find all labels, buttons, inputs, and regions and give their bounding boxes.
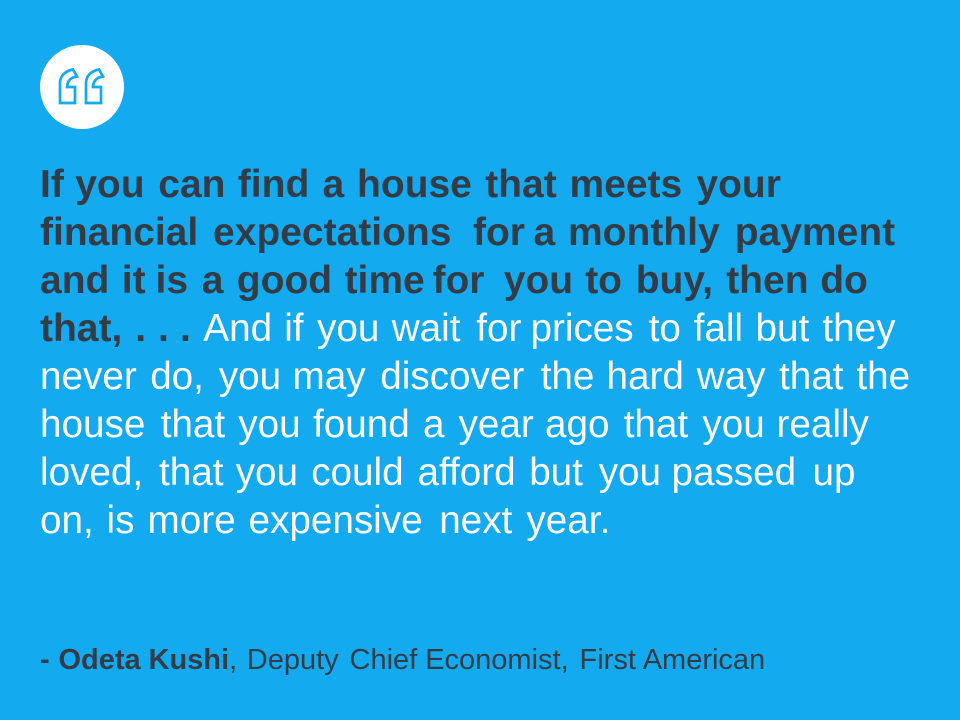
- regular quote lines: hard: [606, 355, 695, 398]
- regular quote lines: you: [219, 355, 292, 398]
- regular quote lines: ago: [545, 403, 620, 446]
- regular quote lines: up: [812, 451, 856, 494]
- regular quote lines: they: [822, 307, 896, 350]
- attribution: Economist,: [425, 644, 577, 676]
- regular quote lines: that: [161, 403, 236, 446]
- regular quote lines: afford: [418, 451, 526, 494]
- regular quote lines: you: [317, 307, 390, 350]
- bold quote lines: for: [432, 259, 495, 302]
- regular quote lines: never: [40, 355, 147, 398]
- bold quote lines: to: [585, 259, 633, 302]
- regular quote lines: a: [423, 403, 455, 446]
- regular quote lines: [40, 307, 910, 542]
- regular quote lines: passed: [672, 451, 807, 494]
- bold quote lines: time: [344, 259, 436, 302]
- bold quote lines: If: [40, 163, 75, 206]
- attribution: Odeta: [58, 644, 149, 676]
- regular quote lines: could: [311, 451, 414, 494]
- regular quote lines: is: [106, 499, 145, 542]
- regular quote lines: year.: [526, 499, 610, 542]
- regular quote lines: if: [284, 307, 314, 350]
- bold quote lines: it: [122, 259, 156, 302]
- regular quote lines: way: [696, 355, 776, 398]
- regular quote lines: the: [856, 355, 910, 398]
- regular quote lines: but: [529, 451, 594, 494]
- bold quote lines: financial: [40, 211, 209, 254]
- attribution: American: [643, 644, 765, 676]
- bold quote lines: that: [485, 163, 568, 206]
- regular quote lines: you: [599, 451, 672, 494]
- bold quote lines: a: [322, 163, 355, 206]
- regular quote lines: And: [203, 307, 283, 350]
- regular quote lines: do,: [150, 355, 215, 398]
- bold quote lines: you: [504, 259, 584, 302]
- attribution: ,: [229, 644, 245, 676]
- attribution: First: [580, 644, 644, 676]
- regular quote lines: fall: [694, 307, 754, 350]
- bold quote lines: your: [696, 163, 781, 206]
- bold quote lines: expectations: [213, 211, 462, 254]
- bold quote lines: house: [357, 163, 483, 206]
- bold quote lines: monthly: [568, 211, 730, 254]
- bold quote lines: a: [202, 259, 234, 302]
- regular quote lines: but: [756, 307, 820, 350]
- regular quote lines: year: [458, 403, 544, 446]
- regular quote lines: house: [40, 403, 156, 446]
- bold quote lines: then: [726, 259, 819, 302]
- bold quote lines: that,: [40, 307, 133, 350]
- regular quote lines: to: [649, 307, 692, 350]
- bold quote lines: buy,: [636, 259, 724, 302]
- bold quote lines: meets: [570, 163, 693, 206]
- regular quote lines: wait: [391, 307, 471, 350]
- regular quote lines: on,: [40, 499, 104, 542]
- regular quote lines: loved,: [40, 451, 154, 494]
- bold quote lines: can: [158, 163, 236, 206]
- bold quote lines: for: [473, 211, 536, 254]
- regular quote lines: really: [776, 403, 870, 446]
- regular quote lines: you: [702, 403, 775, 446]
- bold quote lines: is: [156, 259, 199, 302]
- bold quote lines: you: [75, 163, 155, 206]
- regular quote lines: next: [439, 499, 523, 542]
- regular quote lines: found: [313, 403, 420, 446]
- attribution: Kushi: [148, 644, 229, 676]
- regular quote lines: the: [541, 355, 605, 398]
- bold quote lines: .: [158, 307, 180, 350]
- regular quote lines: you: [236, 451, 309, 494]
- bold quote lines: .: [180, 307, 191, 350]
- regular quote lines: for: [476, 307, 532, 350]
- regular quote lines: more: [148, 499, 246, 542]
- bold quote lines: payment: [735, 211, 895, 254]
- attribution: Chief: [350, 644, 425, 676]
- attribution: Deputy: [247, 644, 347, 676]
- bold quote lines: a: [534, 211, 566, 254]
- bold quote lines: good: [237, 259, 343, 302]
- bold quote lines: find: [238, 163, 320, 206]
- attribution: -: [40, 644, 58, 676]
- regular quote lines: you: [238, 403, 311, 446]
- regular quote lines: expensive: [248, 499, 433, 542]
- regular quote lines: that: [779, 355, 854, 398]
- bold quote lines: do: [820, 259, 868, 302]
- regular quote lines: that: [624, 403, 699, 446]
- bold quote lines: and: [40, 259, 120, 302]
- bold quote lines: [40, 163, 895, 350]
- regular quote lines: may: [292, 355, 376, 398]
- regular quote lines: that: [159, 451, 234, 494]
- regular quote lines: prices: [530, 307, 644, 350]
- regular quote lines: discover: [380, 355, 535, 398]
- bold quote lines: .: [135, 307, 157, 350]
